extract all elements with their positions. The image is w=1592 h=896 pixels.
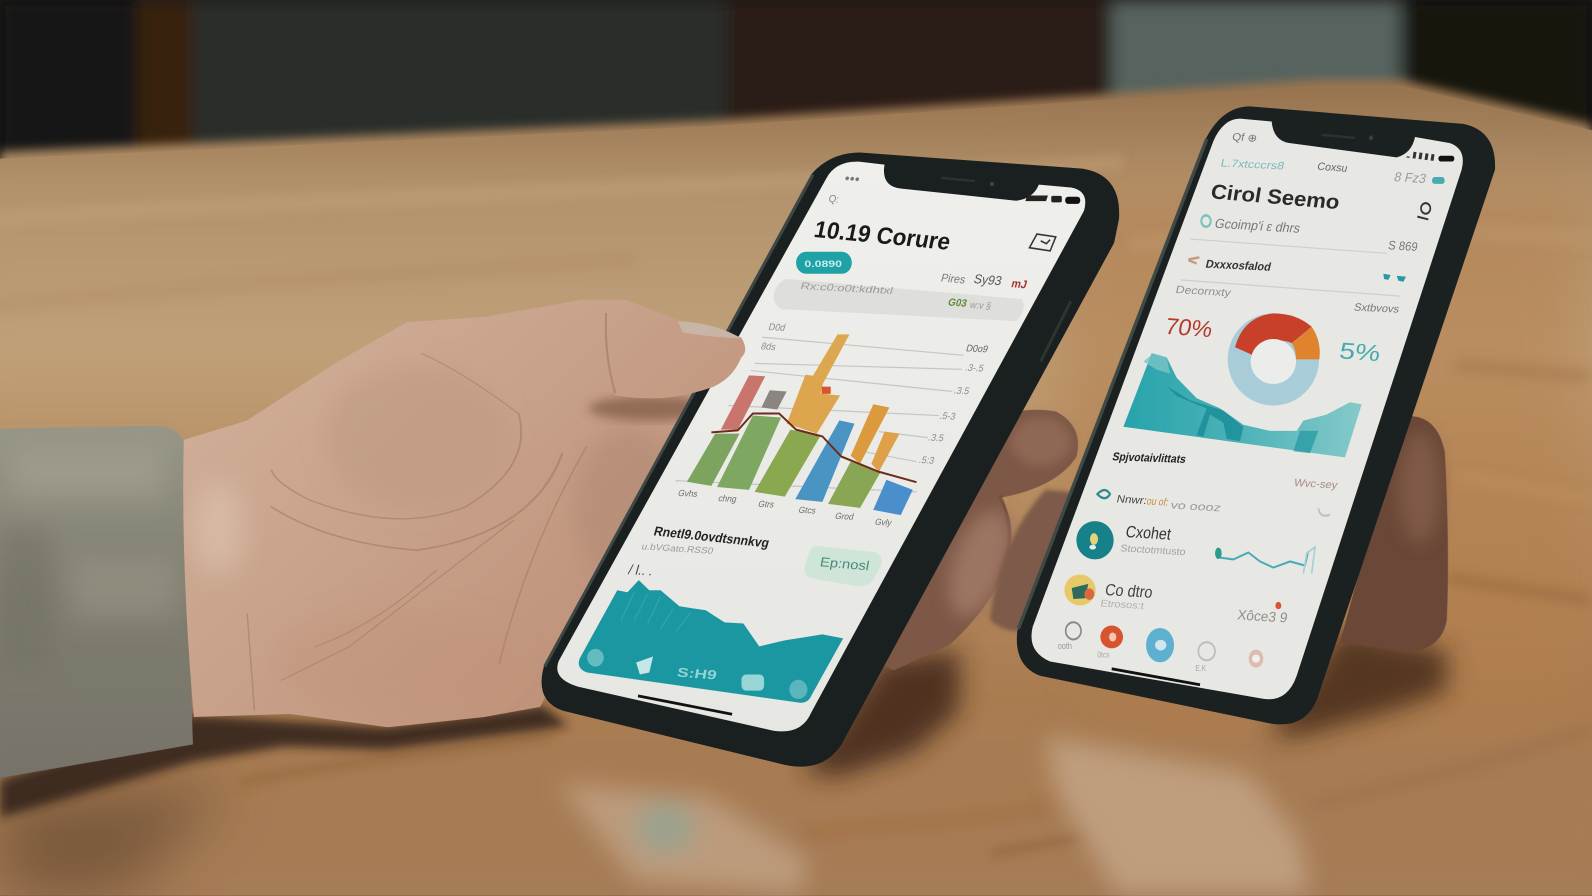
account row (1188, 257, 1406, 282)
dashboard title: Cirol Seemo (1209, 180, 1341, 214)
top right labels (939, 271, 1028, 291)
shadow: phone shadows on the table (802, 630, 1447, 777)
search bar (773, 279, 1024, 321)
top right labels: Pires (939, 272, 967, 287)
status bar icons: Q: (827, 194, 840, 206)
status bar icons: ●●● (844, 172, 861, 184)
area chart marks: / l.. . (627, 562, 655, 578)
list item two value: Xôce3 9 (1236, 606, 1289, 626)
chart captions (1174, 284, 1401, 316)
notch details (1322, 135, 1373, 140)
bar chart (687, 334, 913, 515)
nav icons (587, 649, 807, 699)
search bar: Rx:c0:o0t:kdhtxl (799, 281, 894, 297)
row divider lines (1180, 239, 1400, 296)
list item two text: Etrosos:t (1100, 598, 1145, 611)
green badge (804, 546, 882, 586)
list filter row (1097, 490, 1330, 516)
phone left side buttons (1041, 301, 1071, 361)
red percent: 70% (1163, 314, 1215, 343)
home indicator (638, 696, 732, 714)
status bar icons (827, 172, 1080, 206)
home indicator (1112, 669, 1200, 685)
teal percent: 5% (1337, 339, 1382, 367)
dashboard title: 10.19 Corure (812, 215, 953, 255)
chart axis labels: 8ds (759, 341, 777, 353)
list filter row: ou of: (1145, 496, 1170, 509)
teal pill (796, 252, 852, 274)
calendar icon (1029, 234, 1056, 251)
list item one text: Stoctotmtusto (1120, 543, 1186, 557)
list item two text: Co dtro (1104, 581, 1154, 602)
sleeve (0, 426, 193, 778)
chart axis labels: D0o9 (965, 343, 989, 355)
nav icons: S:H9 (676, 665, 718, 683)
fingers behind the left phone (873, 410, 1078, 670)
chart axis labels (759, 322, 989, 467)
section heading: Rnetl9.0ovdtsnnkvg (652, 523, 771, 550)
bar labels: Gtrs (757, 499, 776, 510)
phone right bezel highlight (1018, 139, 1207, 629)
chart axis labels: .5:3 (918, 455, 936, 467)
status bar: Qf ⊕ (1231, 132, 1258, 145)
chart axis labels: .3-.5 (964, 362, 985, 375)
status bar: Coxsu (1316, 161, 1349, 175)
section subtext: u.bVGato.RSS0 (640, 541, 715, 556)
teal pill: 0.0890 (804, 259, 842, 269)
list heading: Spjvotaivlittats (1111, 451, 1187, 466)
top right labels: mJ (1010, 278, 1028, 291)
list item two icon (1064, 575, 1096, 606)
teal stepped area chart (1123, 353, 1362, 457)
teal area chart and nav bar (579, 580, 843, 703)
phone right: spending dashboard with donut (1017, 106, 1495, 724)
phone right body (1017, 106, 1495, 724)
list item one icon (1076, 521, 1114, 559)
bottom nav icons (1058, 622, 1263, 673)
table reflections of the phones (558, 736, 1310, 894)
top right labels: Sy93 (972, 271, 1004, 288)
bar labels: Gvly (874, 517, 894, 528)
line chart overlay (711, 414, 917, 482)
hand (183, 300, 692, 728)
bar labels (677, 488, 894, 528)
status bar: 8 Fz3 (1393, 169, 1428, 186)
shadow under hand and sleeve (0, 706, 569, 818)
background: blurred room behind the table (0, 0, 1592, 203)
bar labels: chng (717, 493, 738, 504)
bar labels: Gvhs (677, 488, 700, 499)
search bar: w:v § (967, 300, 993, 312)
left phone notch details (941, 178, 994, 186)
bar labels: Grod (834, 511, 855, 522)
phone left screen (557, 162, 1085, 731)
bottom nav icons: E.K (1195, 663, 1206, 673)
list filter row: Nnwr: (1115, 494, 1148, 507)
list item two value (1236, 602, 1289, 626)
phone left: finance dashboard with bar chart (542, 153, 1119, 767)
phone right screen (1031, 119, 1463, 699)
list item one text (1120, 523, 1186, 557)
thumb over the phone edge (605, 300, 745, 398)
green badge: Ep:nosl (819, 555, 870, 573)
bottom nav icons: ooth (1058, 642, 1072, 651)
account row: Dxxxosfalod (1204, 258, 1272, 274)
list filter row: vo oooz (1169, 500, 1222, 515)
chart axis labels: .5-3 (938, 411, 957, 423)
phone left bezel highlight (545, 175, 813, 667)
fingers behind the right phone (990, 416, 1448, 652)
search icon (1417, 203, 1430, 219)
sparkline (1215, 547, 1315, 574)
status bar: L.7xtcccrs8 (1219, 158, 1286, 173)
list item one text: Cxohet (1124, 523, 1173, 544)
search bar: G03 (947, 297, 968, 310)
status bar: .llll (1405, 150, 1436, 163)
bottom nav icons: 0tcs (1097, 650, 1110, 660)
chart captions: Decornxty (1174, 284, 1232, 300)
bar labels: Gtcs (797, 505, 818, 516)
chart captions: Sxtbvovs (1353, 302, 1401, 316)
chart axis labels: D0d (767, 322, 787, 334)
chart grid lines (676, 337, 964, 492)
phone left body (542, 153, 1119, 767)
donut chart (1228, 313, 1320, 406)
status bar (1219, 132, 1454, 186)
subtitle: Gcoimp'i ε dhrs (1213, 216, 1302, 236)
chart axis labels: .3.5 (927, 432, 945, 444)
amount label: S 869 (1387, 239, 1419, 254)
list item two text (1100, 581, 1154, 611)
chart axis labels: .3.5 (953, 385, 971, 397)
list caption right: Wvc-sey (1293, 477, 1339, 492)
